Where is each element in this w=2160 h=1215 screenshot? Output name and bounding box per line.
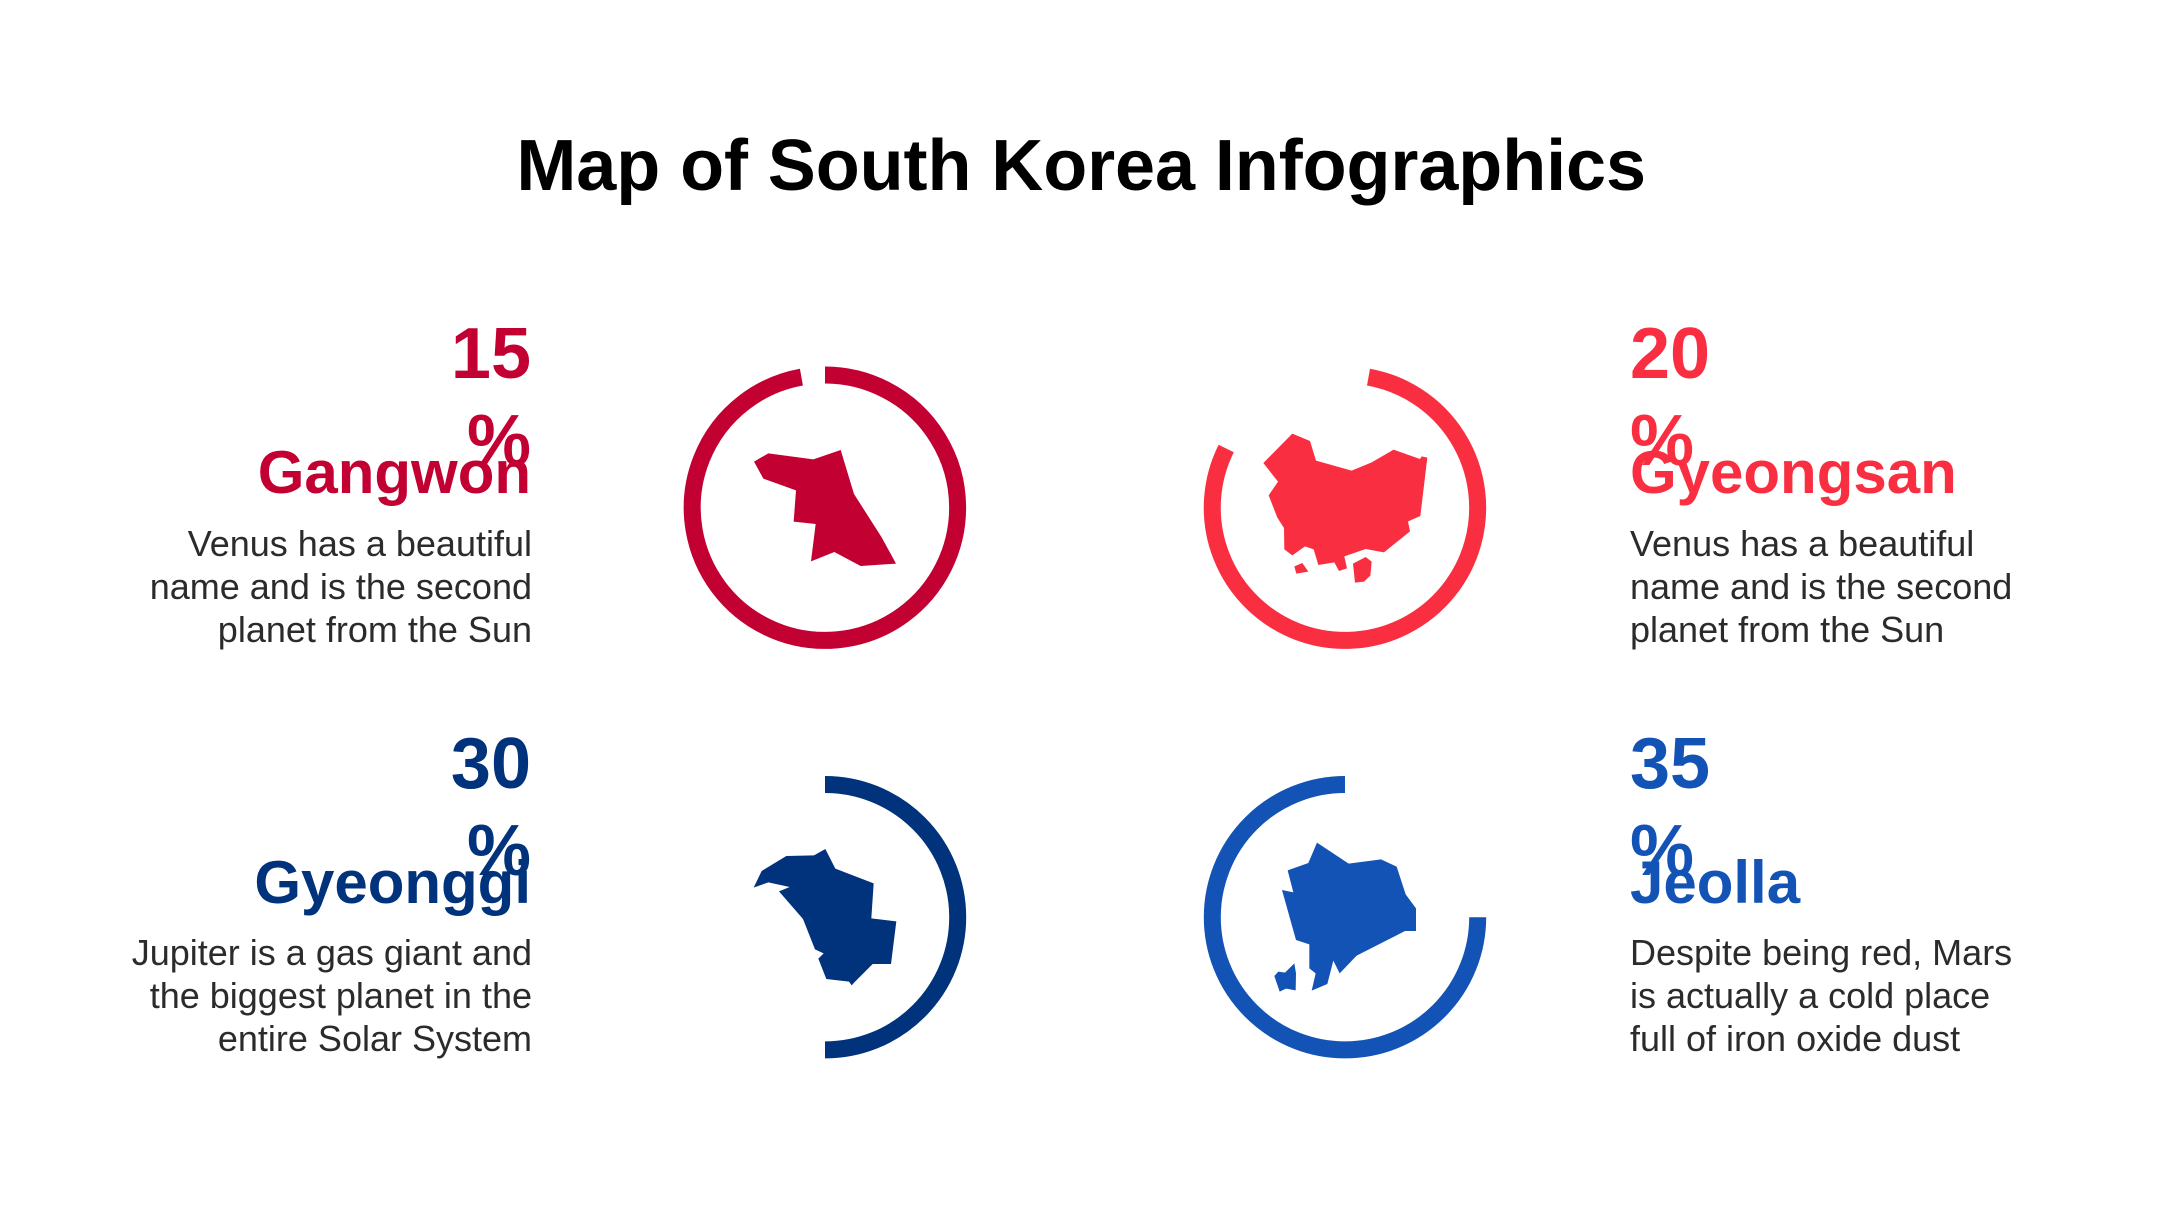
chart: Jeolla ring and map bbox=[1212, 784, 1478, 1050]
panel: Gangwon text bbox=[150, 314, 532, 650]
heading: Gyeonggi: Gyeonggi bbox=[254, 849, 531, 916]
panel: Gyeonggi text bbox=[132, 724, 532, 1059]
percentage: 30% bbox=[451, 724, 531, 891]
percentage: 15%: % bbox=[467, 401, 531, 481]
description: Gangwon bbox=[150, 523, 532, 650]
percentage: 35% bbox=[1630, 724, 1710, 891]
description: Jeolla: is actually a cold place bbox=[1630, 975, 1990, 1016]
progress ring: Gyeonggi bbox=[825, 784, 958, 1050]
description: Gangwon: Venus has a beautiful bbox=[188, 523, 532, 564]
description: Gangwon: name and is the second bbox=[150, 566, 532, 607]
map: Gangwon bbox=[754, 450, 896, 566]
heading: Gyeongsan: Gyeongsan bbox=[1630, 439, 1957, 506]
percentage: 20%: % bbox=[1630, 401, 1694, 481]
description: Gyeongsan: Venus has a beautiful bbox=[1630, 523, 1974, 564]
description: Gyeonggi: Jupiter is a gas giant and bbox=[132, 932, 532, 973]
description: Gyeongsan bbox=[1630, 523, 2012, 650]
progress ring: Gyeongsan bbox=[1212, 377, 1478, 640]
percentage: 20% bbox=[1630, 314, 1710, 481]
percentage: 20%: 20 bbox=[1630, 314, 1710, 394]
progress ring: Jeolla bbox=[1212, 784, 1478, 1050]
map: Gyeonggi bbox=[754, 849, 896, 985]
percentage: 30%: 30 bbox=[451, 724, 531, 804]
chart: Gangwon ring and map bbox=[692, 375, 958, 640]
map: Jeolla bbox=[1274, 843, 1416, 992]
percentage: 35%: 35 bbox=[1630, 724, 1710, 804]
heading: Gangwon: Gangwon bbox=[258, 439, 531, 506]
chart: Gyeonggi ring and map bbox=[754, 784, 958, 1050]
chart: Gyeongsan ring and map bbox=[1212, 377, 1478, 640]
description: Jeolla: Despite being red, Mars bbox=[1630, 932, 2012, 973]
description: Jeolla: full of iron oxide dust bbox=[1630, 1018, 1960, 1059]
description: Gyeonggi: the biggest planet in the bbox=[150, 975, 532, 1016]
progress ring: Gangwon bbox=[692, 375, 958, 640]
title: Map of South Korea Infographics bbox=[516, 126, 1646, 206]
panel: Gyeongsan text bbox=[1630, 314, 2012, 650]
description: Jeolla bbox=[1630, 932, 2012, 1059]
percentage: 15% bbox=[451, 314, 531, 481]
description: Gangwon: planet from the Sun bbox=[218, 609, 532, 650]
description: Gyeongsan: name and is the second bbox=[1630, 566, 2012, 607]
description: Gyeonggi bbox=[132, 932, 532, 1059]
panel: Jeolla text bbox=[1630, 724, 2012, 1059]
percentage: 35%: % bbox=[1630, 811, 1694, 891]
percentage: 15%: 15 bbox=[451, 314, 531, 394]
description: Gyeonggi: entire Solar System bbox=[218, 1018, 532, 1059]
description: Gyeongsan: planet from the Sun bbox=[1630, 609, 1944, 650]
heading: Jeolla: Jeolla bbox=[1630, 849, 1800, 916]
percentage: 30%: % bbox=[467, 811, 531, 891]
map: Gyeongsan bbox=[1263, 434, 1427, 583]
